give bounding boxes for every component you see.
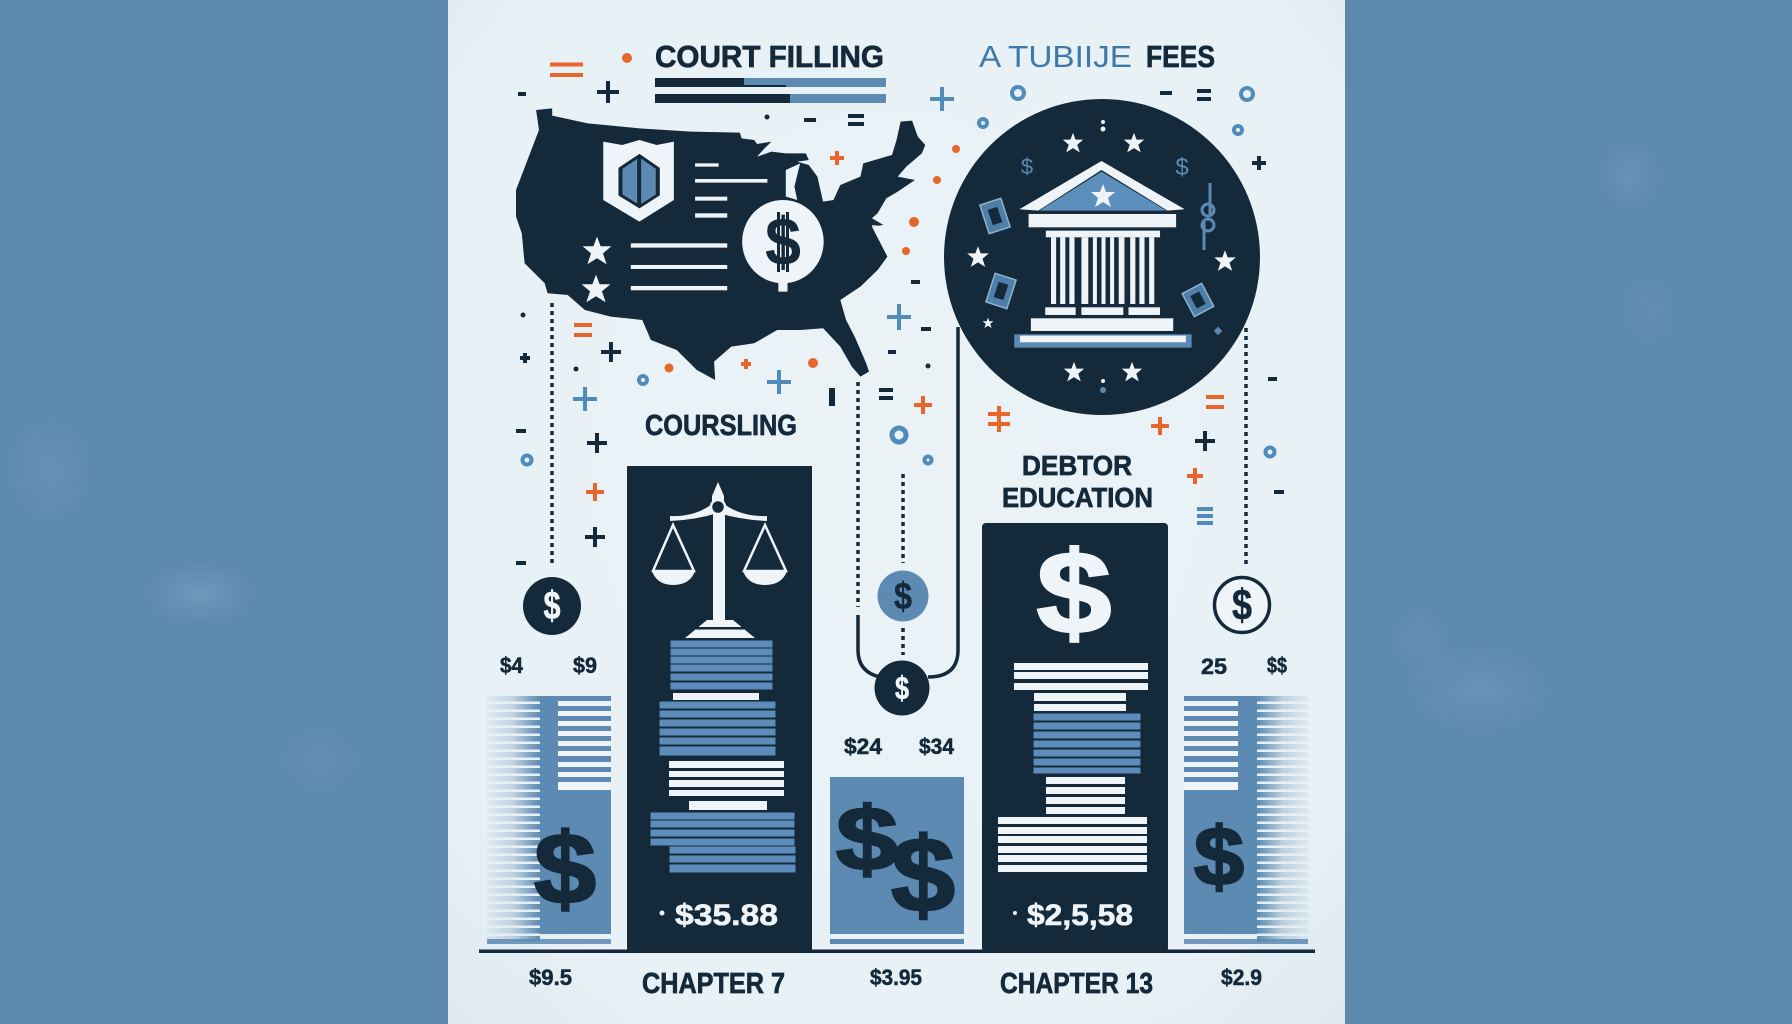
- white stripes: [1184, 701, 1238, 790]
- shield: [603, 140, 674, 222]
- baseline axis: [479, 950, 1315, 953]
- map stars: [582, 237, 611, 302]
- labels above bars: $$: [1267, 653, 1287, 678]
- coin: right: [1214, 578, 1270, 632]
- coin: blue: $: [894, 576, 912, 618]
- labels below bars: $2.9: [1221, 965, 1262, 990]
- connector: solid U line: [858, 327, 958, 677]
- white stripes: [558, 701, 611, 790]
- scattered icons: orange marks: [550, 64, 1224, 501]
- scattered icons: dark plus and dash marks: [516, 81, 1284, 563]
- labels above bars: $34: [919, 734, 955, 759]
- chapter 7 amount: $35.88: [675, 899, 778, 932]
- dollar signs: $: [891, 816, 955, 934]
- connector: dotted lines around courthouse: [858, 328, 1246, 655]
- coin: lower center: [874, 660, 930, 716]
- scattered icons: small dark dots: [520, 114, 930, 406]
- circle with courthouse: [944, 99, 1260, 415]
- heading: fees: A TUBIIJE: [979, 39, 1132, 74]
- labels above bars: $24: [844, 734, 883, 759]
- labels above bars: $9: [573, 653, 597, 678]
- courthouse: [1014, 161, 1192, 348]
- small blue dollar signs: $: [1021, 154, 1033, 179]
- panel: Chapter 7 bar: [627, 466, 812, 952]
- map of the United States: [516, 108, 925, 380]
- coin: lower center: $: [895, 670, 909, 706]
- stars around courthouse: [967, 133, 1236, 381]
- blue key ornament: [1202, 183, 1214, 250]
- banknote icons: [980, 198, 1214, 317]
- scattered icons: blue plus marks: [573, 87, 1213, 523]
- labels above bars: [500, 653, 1287, 759]
- large dollar sign: $: [1036, 527, 1112, 658]
- coin on the map: [742, 200, 824, 292]
- book stacks: [998, 663, 1148, 872]
- scattered icons: orange dots: [622, 53, 960, 372]
- labels below bars: CHAPTER 7: [642, 968, 785, 1000]
- heading: court filling: COURT FILLING: [655, 39, 884, 74]
- heading: fees: [979, 39, 1215, 74]
- small blue dollar signs: $: [1175, 154, 1189, 181]
- panel: central light sheet: [448, 0, 1345, 1024]
- dollar signs: $: [836, 790, 898, 890]
- chapter 13 amount: $2,5,58: [1027, 899, 1133, 932]
- heading: debtor education: DEBTOR: [1022, 450, 1132, 481]
- labels below bars: [529, 965, 1262, 1000]
- heading: fees: FEES: [1146, 39, 1215, 74]
- labels below bars: $3.95: [870, 965, 922, 990]
- map text lines: [631, 163, 767, 290]
- dollar sign on coin: $: [765, 204, 801, 280]
- connector: dotted line to left coin: [550, 303, 554, 567]
- small dots in circle: [1100, 120, 1222, 393]
- labels below bars: CHAPTER 13: [1000, 968, 1153, 1000]
- panel: right side bar: [1184, 696, 1309, 944]
- coin: left: $: [544, 584, 560, 628]
- panel: Chapter 13 bar: [982, 523, 1168, 952]
- labels above bars: 25: [1201, 654, 1227, 679]
- labels above bars: $4: [500, 653, 524, 678]
- coin: blue: [878, 570, 928, 622]
- heading: coursling: COURSLING: [645, 410, 797, 442]
- scales of justice: [652, 482, 787, 638]
- coin: right: $: [1232, 581, 1252, 630]
- dollar sign: $: [1194, 810, 1244, 903]
- heading: debtor education: EDUCATION: [1002, 482, 1153, 513]
- panel: left side bar: [487, 696, 611, 944]
- labels below bars: $9.5: [529, 965, 572, 990]
- coin: left: [523, 577, 581, 635]
- dollar sign: $: [534, 813, 596, 925]
- book stacks: [651, 641, 795, 872]
- heading: debtor education: [1002, 450, 1153, 513]
- heading: court filling: [655, 39, 886, 103]
- scattered icons: blue rings: [522, 87, 1274, 464]
- dollar signs: [836, 790, 955, 934]
- panel: center small bar: [830, 777, 964, 944]
- small blue dollar signs: [1021, 154, 1189, 181]
